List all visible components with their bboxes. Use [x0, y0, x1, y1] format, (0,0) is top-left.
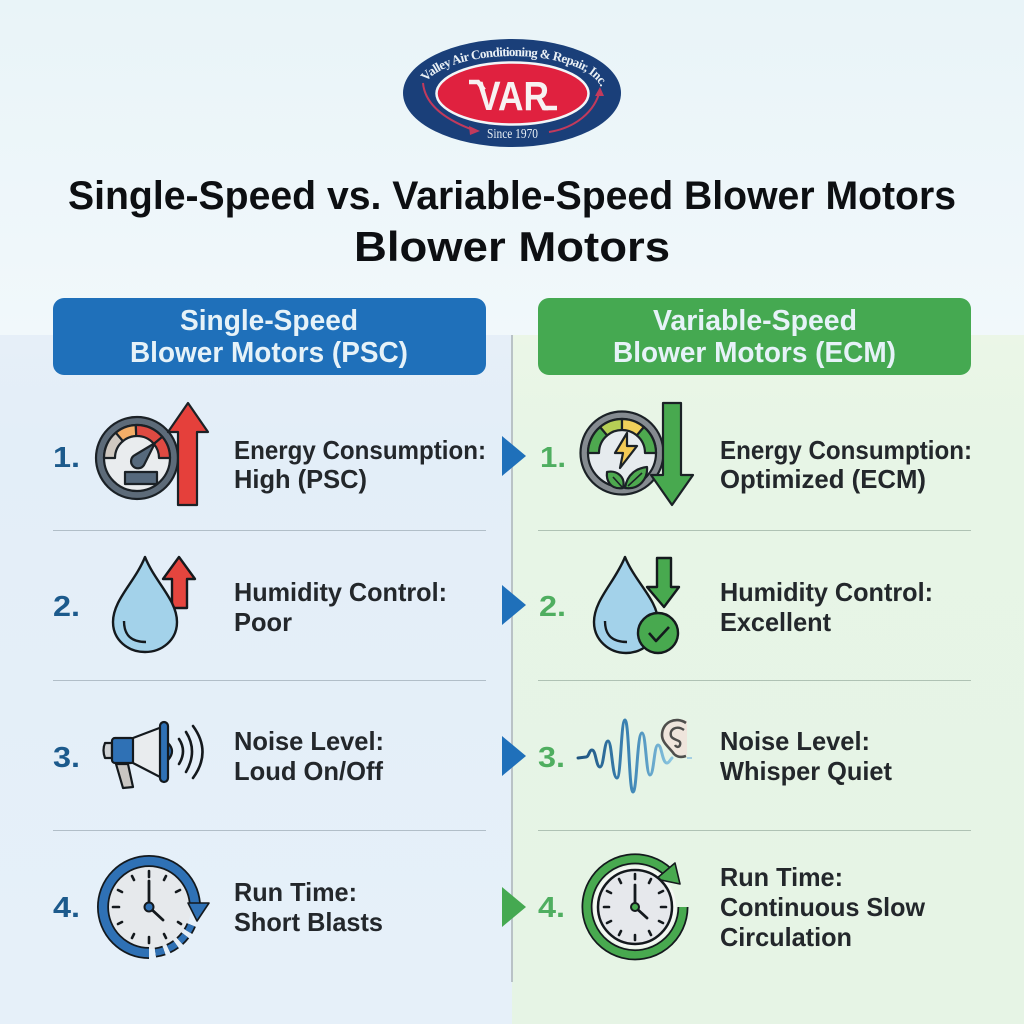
- title: Single-Speed vs. Variable-Speed Blower Motors: [68, 174, 956, 218]
- text: humidity excellent: [720, 577, 933, 637]
- number 3 right: 3.: [538, 742, 565, 774]
- panel: single-speed background: [0, 335, 512, 1024]
- title: Blower Motors: [354, 223, 670, 270]
- number 1 left: 1.: [53, 442, 80, 474]
- text: energy high: [234, 435, 486, 494]
- text: energy high: High (PSC): [234, 464, 367, 494]
- text: energy high: Energy Consumption:: [234, 435, 486, 465]
- title: [68, 174, 956, 270]
- logo: Valley Air Conditioning & Repair: [403, 39, 621, 147]
- number 4 right: 4.: [538, 892, 565, 924]
- header: single-speed: Single-Speed: [180, 305, 358, 337]
- text: noise quiet: Noise Level:: [720, 726, 870, 756]
- text: run time short: Run Time:: [234, 877, 357, 907]
- header: variable-speed: [538, 298, 971, 375]
- text: noise loud: Loud On/Off: [234, 756, 383, 786]
- icon: drop with down arrow and check: [594, 557, 679, 653]
- text: noise loud: Noise Level:: [234, 726, 384, 756]
- header: variable-speed: Blower Motors (ECM): [613, 337, 896, 369]
- number 2 left: 2.: [53, 591, 80, 623]
- logo: Valley Air Conditioning & Repair: VAR: [477, 73, 549, 119]
- number 4 left: 4.: [53, 892, 80, 924]
- text: noise quiet: Whisper Quiet: [720, 756, 892, 786]
- header: single-speed: Blower Motors (PSC): [130, 337, 408, 369]
- text: run time short: Short Blasts: [234, 907, 383, 937]
- arrow 3: [502, 736, 526, 776]
- text: humidity excellent: Humidity Control:: [720, 577, 933, 607]
- logo: Valley Air Conditioning & Repair: Valley Air Conditioning & Repair, Inc.: [420, 47, 604, 86]
- text: energy optimized: [720, 435, 972, 494]
- text: energy optimized: Energy Consumption:: [720, 435, 972, 465]
- arrow 4: [502, 887, 526, 927]
- text: noise quiet: [720, 726, 892, 786]
- arrow 2: [502, 585, 526, 625]
- number 3 left: 3.: [53, 742, 80, 774]
- text: run time short: [234, 877, 383, 937]
- icon: sound wave and ear: [578, 719, 692, 792]
- number 2 right: 2.: [539, 591, 566, 623]
- header: single-speed: [53, 298, 486, 375]
- header: variable-speed: Variable-Speed: [653, 305, 857, 337]
- text: humidity poor: [234, 577, 447, 637]
- text: humidity poor: Humidity Control:: [234, 577, 447, 607]
- text: noise loud: [234, 726, 384, 786]
- text: humidity excellent: Excellent: [720, 607, 831, 637]
- icon: clock with broken arrow: [103, 861, 209, 953]
- arrow 1: [502, 436, 526, 476]
- icon: clock with continuous arrow: [587, 859, 683, 955]
- text: run time continuous: Circulation: [720, 922, 852, 952]
- text: run time continuous: [720, 862, 926, 952]
- icon: eco gauge with down arrow: [580, 403, 693, 505]
- icon: gauge with up arrow: [96, 403, 208, 505]
- text: humidity poor: Poor: [234, 607, 292, 637]
- text: energy optimized: Optimized (ECM): [720, 464, 926, 494]
- text: run time continuous: Run Time:: [720, 862, 843, 892]
- icon: drop with up arrow: [113, 557, 195, 652]
- panel: variable-speed background: [512, 335, 1024, 1024]
- icon: megaphone: [104, 722, 202, 788]
- logo: Valley Air Conditioning & Repair: Since 1970: [487, 127, 538, 142]
- number 1 right: 1.: [540, 442, 566, 474]
- text: run time continuous: Continuous Slow: [720, 892, 926, 922]
